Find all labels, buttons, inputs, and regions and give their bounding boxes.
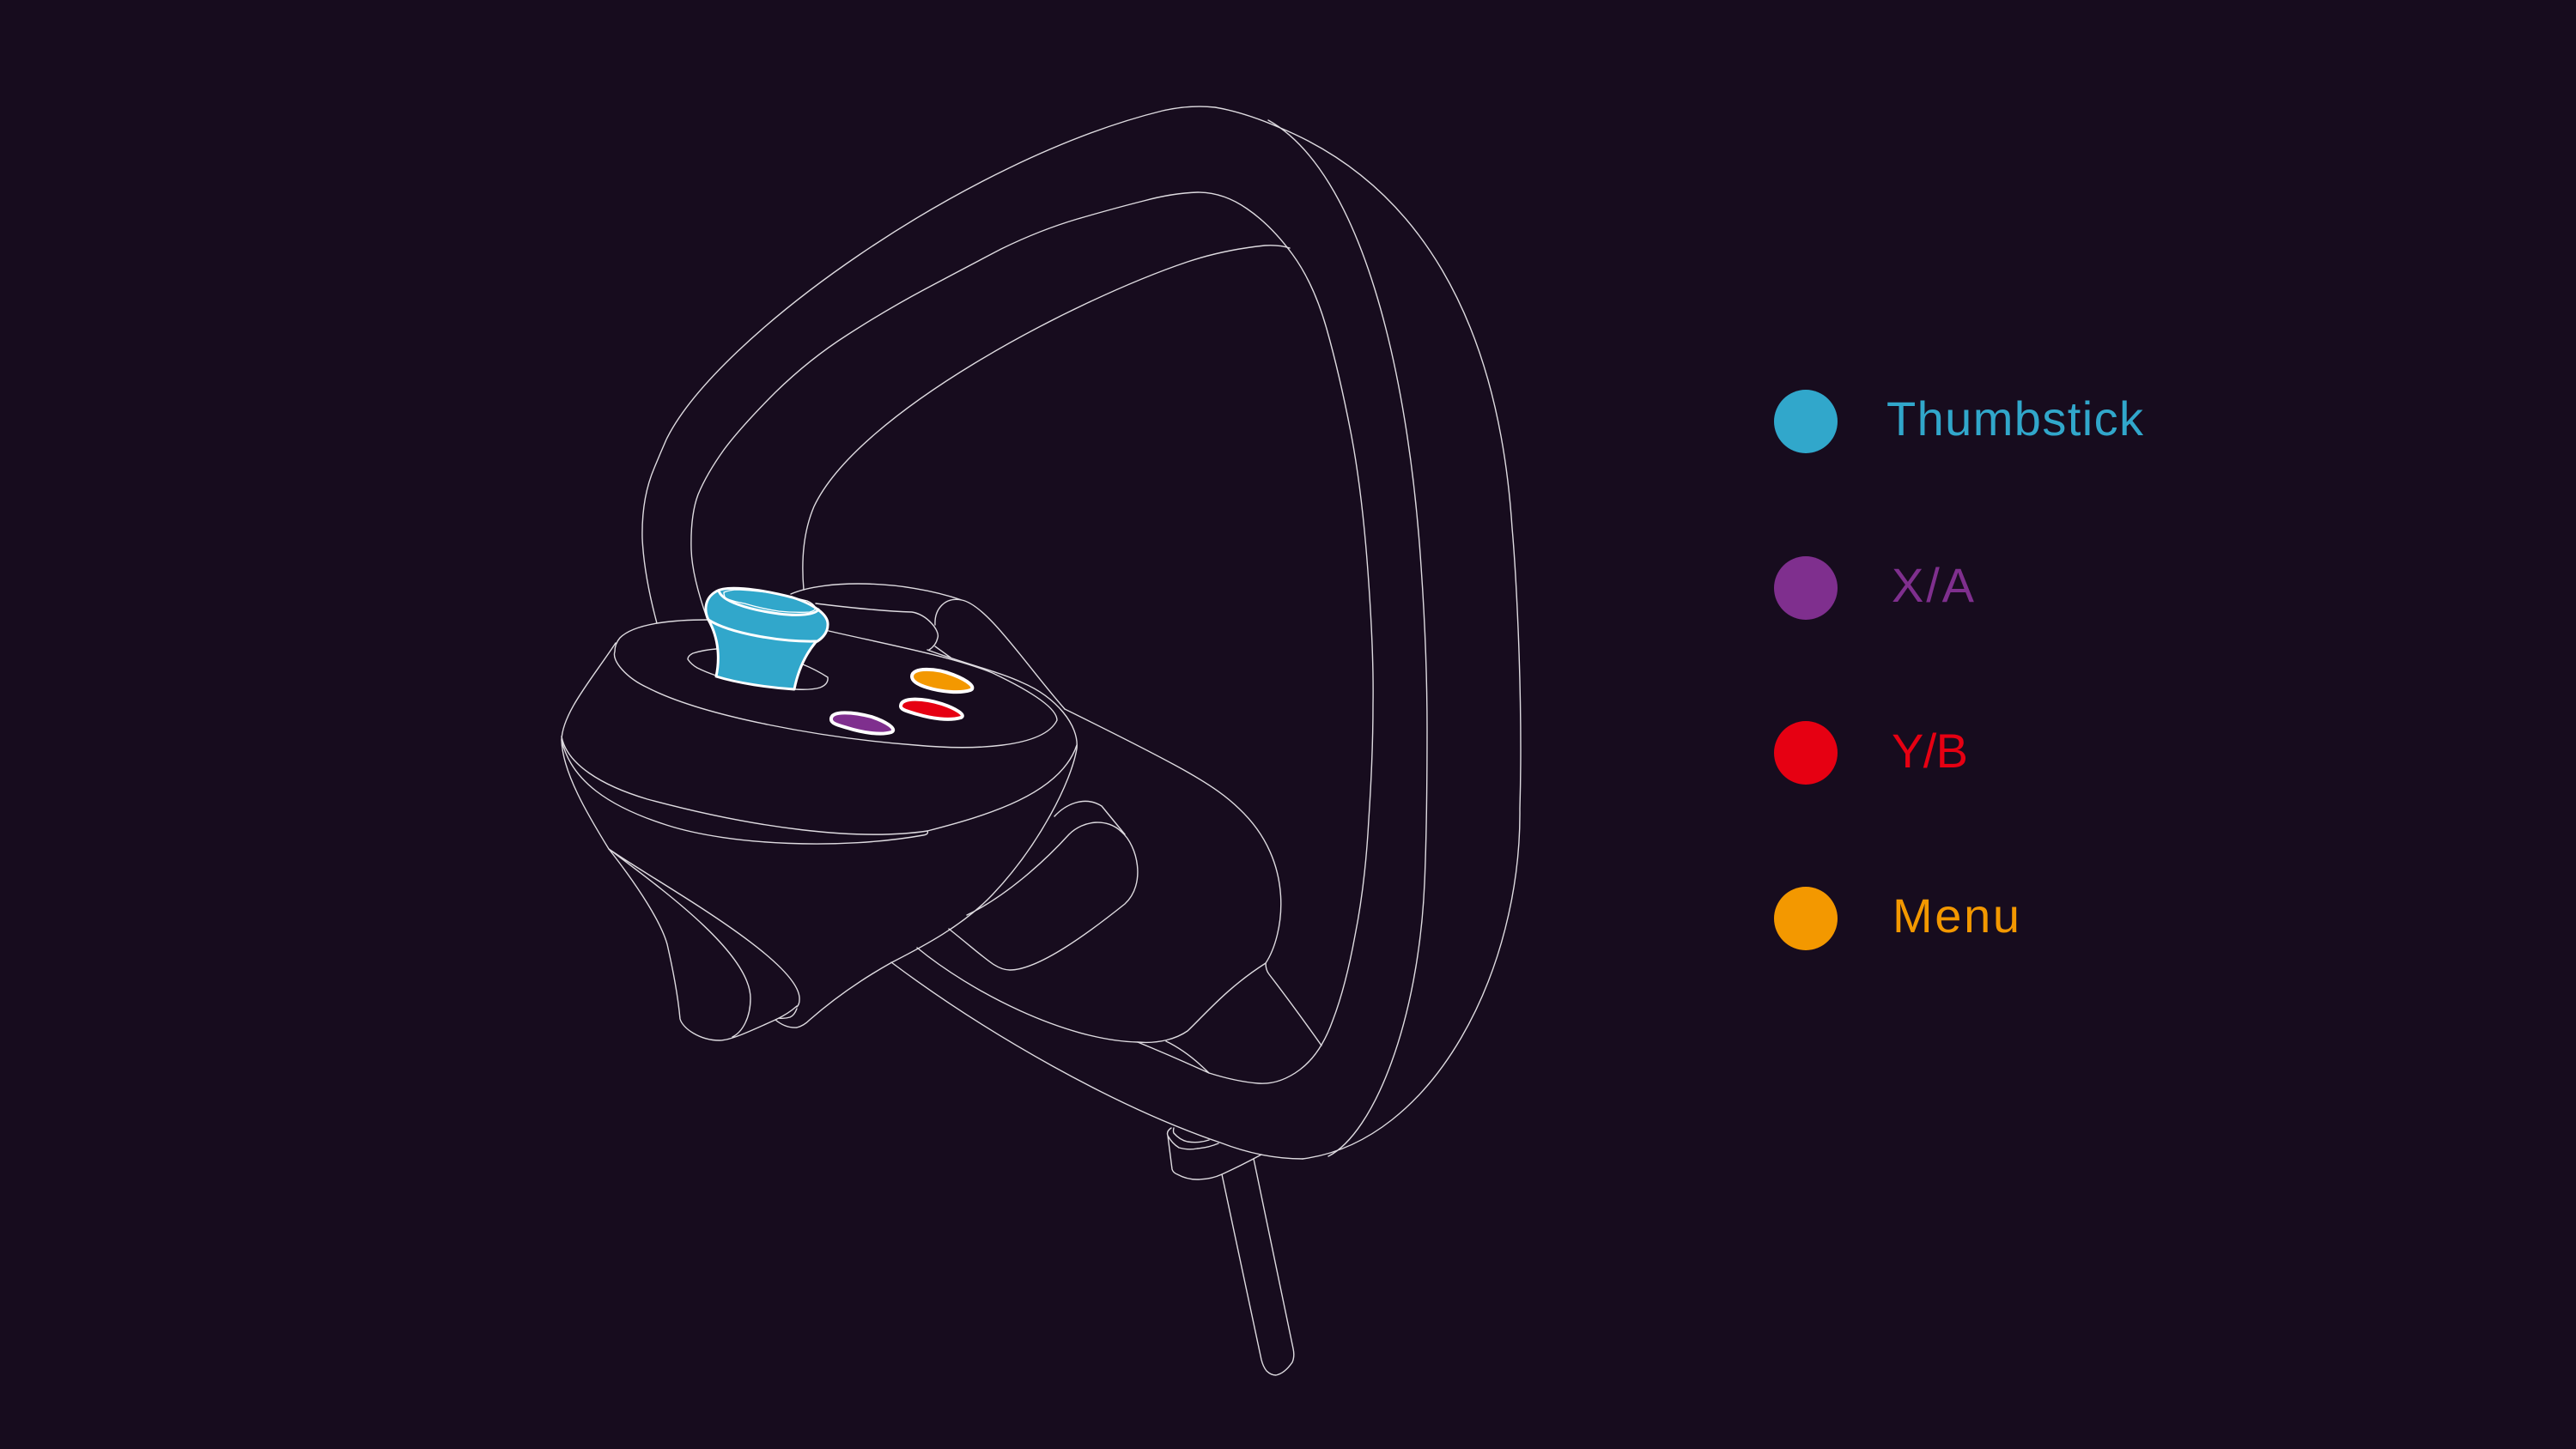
handle seam <box>1266 963 1321 1046</box>
legend item: X/A: X/A <box>1892 558 1975 612</box>
handle outer band <box>891 962 1303 1159</box>
body right edge <box>775 650 1077 1028</box>
button: menu <box>912 670 972 692</box>
tracking ring: middle right edge <box>1268 120 1427 1156</box>
thumbstick <box>706 588 828 689</box>
legend <box>1774 390 2144 950</box>
legend item: Thumbstick <box>1774 390 2144 453</box>
controller line drawing <box>562 106 1521 1375</box>
body rim upper <box>562 737 1077 834</box>
cable stem <box>1222 1159 1294 1375</box>
thumbstick socket <box>688 649 828 689</box>
tracking ring: outer arc <box>642 106 1521 1159</box>
cable mount <box>1168 1128 1261 1179</box>
grip foot <box>609 849 799 1040</box>
thumb rest <box>791 584 1065 709</box>
trigger <box>949 801 1138 970</box>
body left edge <box>562 643 616 849</box>
button: Y/B <box>901 700 963 719</box>
button: X/A <box>831 712 893 734</box>
tracking ring: second arc <box>691 192 1373 1083</box>
tracking ring: inner arc <box>803 246 1290 590</box>
legend item: Menu <box>1774 887 2020 950</box>
legend item: Y/B: Y/B <box>1892 724 1968 778</box>
handle inner band <box>917 709 1281 1042</box>
handle lower seams <box>1138 1041 1209 1073</box>
top disc face <box>614 620 1057 748</box>
legend item: Y/B <box>1774 721 1968 785</box>
legend item: Menu: Menu <box>1893 888 2020 943</box>
legend item: X/A <box>1774 556 1975 620</box>
body rim lower <box>562 740 927 844</box>
legend item: Thumbstick: Thumbstick <box>1886 391 2144 446</box>
